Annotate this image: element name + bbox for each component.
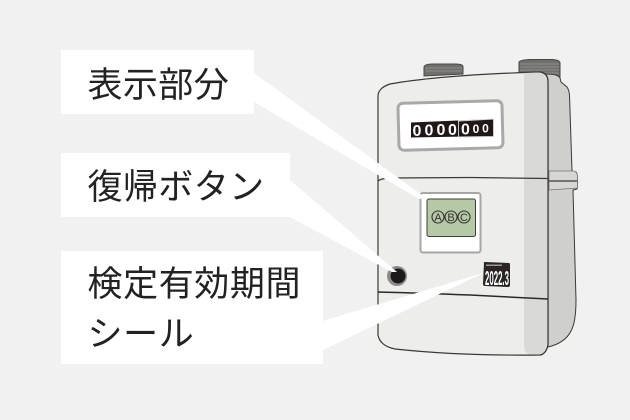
left top connector (424, 64, 463, 76)
label: inspection seal: シール (88, 315, 194, 354)
ABC indicators (432, 211, 470, 224)
odometer: 0 (461, 122, 470, 138)
inspection seal: 2022.3 (485, 268, 509, 290)
ABC indicators: B (447, 212, 455, 224)
counter window (398, 101, 503, 150)
label: reset button (61, 153, 290, 217)
odometer: 0 (482, 122, 489, 136)
LCD screen (427, 199, 476, 236)
odometer: 0 (425, 122, 434, 140)
ABC indicators: A (434, 212, 442, 224)
shaded right edge (524, 72, 547, 354)
icon: gas meter (378, 60, 578, 355)
label: display (61, 50, 254, 114)
upper band line (378, 178, 548, 181)
label: display: 表示部分 (88, 66, 229, 105)
meter front body (378, 72, 548, 355)
odometer: 0 (448, 122, 457, 139)
odometer (411, 119, 494, 140)
label: reset button: 復帰ボタン (88, 168, 265, 207)
leader: seal (323, 273, 483, 350)
ABC indicators: C (460, 212, 468, 224)
odometer: 0 (437, 122, 446, 139)
side panel collar (549, 171, 578, 190)
odometer: 0 (413, 123, 422, 140)
leader: display (254, 73, 426, 199)
lower band line (378, 292, 548, 299)
leader: reset button (290, 180, 397, 272)
odometer: 0 (473, 122, 480, 136)
label: inspection seal: 検定有効期間 (88, 265, 301, 304)
meter side panel (546, 74, 578, 347)
reset button (387, 266, 407, 286)
display unit (420, 193, 480, 252)
label: inspection seal (61, 251, 323, 364)
right top connector (519, 60, 560, 78)
